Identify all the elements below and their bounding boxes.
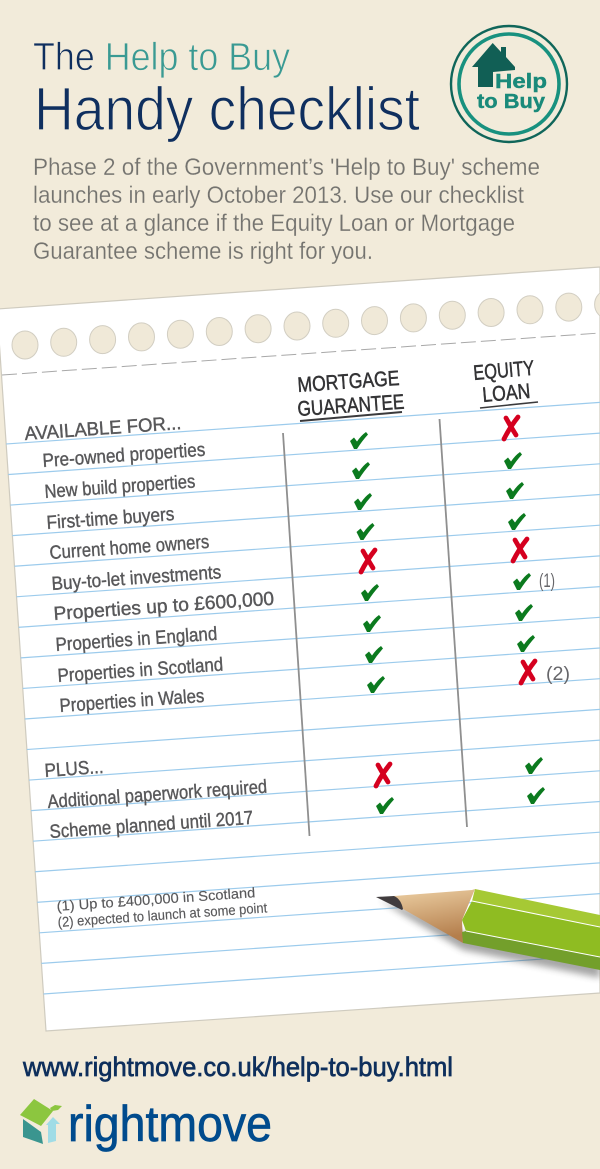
- logo: Help to Buy badge: to Buy: [477, 91, 546, 113]
- checklist labels: First-time buyers: [46, 504, 175, 534]
- icon: pencil: [376, 889, 600, 978]
- panel: notepad paper: [0, 267, 600, 1031]
- checklist labels: Scheme planned until 2017: [49, 808, 254, 843]
- rightmove logo: [20, 1096, 272, 1152]
- icon: house: [472, 43, 515, 87]
- column heading: mortgage guarantee: MORTGAGE: [297, 367, 400, 397]
- title line 2: Handy checklist: [34, 75, 420, 143]
- footnotes: (2) expected to launch at some point: [57, 899, 268, 930]
- marks: equity loan column: [504, 417, 570, 804]
- checklist labels: Properties in Wales: [59, 686, 205, 717]
- icon: rightmove house: [20, 1099, 62, 1144]
- column heading: equity loan: [472, 357, 538, 408]
- intro paragraph: to see at a glance if the Equity Loan or Mortgage: [33, 210, 515, 237]
- column dividers: [283, 419, 467, 836]
- footnotes: [56, 884, 268, 930]
- checklist labels: Properties in Scotland: [57, 654, 224, 687]
- marks: mortgage guarantee column: [350, 432, 394, 814]
- checklist labels: Pre-owned properties: [42, 440, 206, 472]
- checklist labels: [24, 413, 275, 843]
- checklist labels: AVAILABLE FOR...: [24, 413, 182, 445]
- column heading: mortgage guarantee: GUARANTEE: [297, 391, 405, 421]
- checklist labels: Additional paperwork required: [47, 777, 268, 813]
- marks: equity loan column: (2): [546, 664, 570, 685]
- footnotes: (1) Up to £400,000 in Scotland: [56, 884, 256, 914]
- title line 1: The Help to Buy: [33, 36, 290, 79]
- checklist labels: New build properties: [44, 472, 196, 503]
- intro paragraph: launches in early October 2013. Use our checklist: [33, 182, 524, 209]
- pencil body: [472, 889, 600, 927]
- pencil lead: [376, 896, 403, 910]
- rightmove wordmark: rightmove: [68, 1096, 272, 1152]
- checklist labels: Buy-to-let investments: [51, 562, 222, 595]
- column heading: mortgage guarantee: [297, 367, 405, 421]
- column heading: equity loan: LOAN: [481, 380, 531, 407]
- checklist labels: Current home owners: [49, 532, 210, 564]
- checklist labels: Properties up to £600,000: [53, 589, 275, 625]
- website url: www.rightmove.co.uk/help-to-buy.html: [22, 1052, 453, 1082]
- title: [33, 36, 420, 143]
- intro paragraph: Phase 2 of the Government’s 'Help to Buy' scheme: [33, 154, 540, 181]
- pencil wood: [394, 889, 475, 943]
- logo: Help to Buy badge: [451, 26, 567, 142]
- checklist labels: PLUS...: [44, 757, 104, 782]
- marks: equity loan column: (1): [539, 571, 555, 592]
- checklist labels: Properties in England: [55, 624, 218, 656]
- badge text: Help: [495, 71, 547, 93]
- intro paragraph: [33, 154, 540, 265]
- punched holes: [12, 290, 600, 359]
- column heading: equity loan: EQUITY: [472, 357, 535, 385]
- intro paragraph: Guarantee scheme is right for you.: [33, 238, 373, 265]
